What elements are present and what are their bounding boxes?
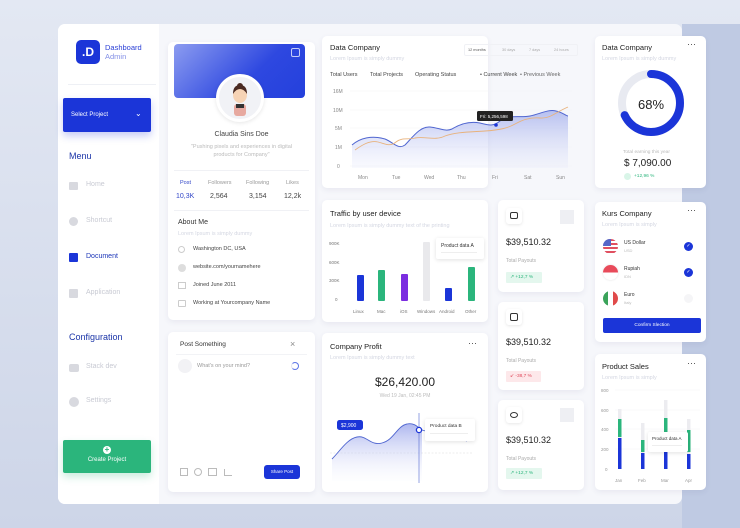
- panel: donut data company: Data Company: [602, 43, 652, 52]
- panel: product sales: ···: [687, 358, 696, 368]
- panel: kurs company: Lorem Ipsum is simply: [602, 222, 657, 228]
- line chart: [333, 89, 568, 181]
- panel: donut data company: [595, 36, 706, 188]
- panel: post something: Post Something: [180, 341, 226, 348]
- tabs: [330, 72, 560, 78]
- bar chart: 0: [335, 297, 338, 302]
- tabs: • Previous Week: [520, 72, 560, 78]
- panel: traffic by device: Lorem Ipsum is simply dummy text of the printing: [330, 223, 450, 229]
- config items: Stack dev: [86, 363, 117, 370]
- range tabs: [464, 44, 578, 56]
- panel: product sales: Lorem Ipsum is simply: [602, 375, 657, 381]
- logo text: Dashboard: [105, 43, 142, 52]
- line chart: Sat: [524, 175, 532, 181]
- avatar: [216, 74, 264, 122]
- line chart: 10M: [333, 108, 343, 114]
- create project button: +: [105, 445, 109, 454]
- stats: 2,564: [210, 193, 228, 200]
- about me: About Me: [178, 219, 208, 226]
- panel: profile: "Pushing pixels and experiences in digital: [191, 144, 292, 150]
- line chart: 0: [337, 164, 340, 170]
- area chart: $2,900: [341, 423, 357, 429]
- stacked bar chart: 200: [601, 447, 609, 452]
- panel: post something: ×: [290, 339, 295, 349]
- currency list: ✓: [686, 243, 691, 249]
- bar chart: Mac: [377, 309, 386, 314]
- stats: 3,154: [249, 193, 267, 200]
- main panel: [58, 24, 682, 504]
- panel: profile: website.com/yournamehere: [193, 264, 261, 270]
- panel: company profit: Company Profit: [330, 342, 382, 351]
- stats: Following: [246, 180, 269, 186]
- text: 24 hours: [554, 48, 569, 52]
- stacked bar chart: Mar: [661, 478, 669, 483]
- line chart: Thu: [457, 175, 466, 181]
- panel: post something: What's on your mind?: [197, 363, 250, 369]
- stacked bar chart: [601, 388, 693, 483]
- line chart: 5M: [335, 126, 342, 132]
- stacked bar chart: 400: [601, 427, 609, 432]
- tabs: Total Users: [330, 72, 358, 78]
- panel: profile: products for Company": [213, 152, 270, 158]
- panel: profile: Lorem Ipsum is simply dummy: [178, 231, 252, 237]
- line chart: Wed: [424, 175, 434, 181]
- line chart: Mon: [358, 175, 368, 181]
- tooltip: [648, 432, 688, 452]
- panel: company profit: Wed 19 Jan, 02:45 PM: [380, 393, 430, 399]
- menu items: Shortcut: [86, 217, 112, 224]
- panel: product sales: [595, 354, 706, 490]
- currency list: [602, 239, 693, 306]
- logo text: [105, 43, 142, 61]
- stats: Followers: [208, 180, 232, 186]
- currency list: US Dollar: [624, 240, 645, 246]
- bar chart: Other: [465, 309, 477, 314]
- share button: Share Post: [271, 469, 293, 474]
- logo text: Admin: [105, 52, 126, 61]
- panel: profile: [168, 42, 315, 320]
- menu items: Home: [86, 181, 105, 188]
- tabs: Operating Status: [415, 72, 456, 78]
- bar chart: 300K: [329, 278, 340, 283]
- stats: 12,2k: [284, 193, 301, 200]
- select project button: Select Project: [71, 112, 108, 118]
- currency list: Italy: [624, 300, 631, 305]
- select project button: [63, 98, 151, 132]
- panel: data company chart: Lorem Ipsum is simply dummy: [330, 56, 404, 62]
- tabs: Total Projects: [370, 72, 403, 78]
- line chart: Tue: [392, 175, 401, 181]
- share button: [264, 465, 300, 479]
- panel: post something: [168, 332, 315, 492]
- currency list: ✓: [686, 269, 691, 275]
- confirm button: Confirm Slection: [634, 323, 670, 328]
- stacked bar chart: Feb: [638, 478, 646, 483]
- panel: kurs company: Kurs Company: [602, 209, 652, 218]
- logo icon: [76, 40, 100, 64]
- panel: data company chart: 12 months: [468, 48, 486, 52]
- payout card 3: [498, 400, 584, 490]
- panel: donut data company: Lorem Ipsum is simply dummy: [602, 56, 676, 62]
- payout card 1: ↗ +12,7 %: [510, 275, 533, 280]
- select project button: ⌄: [135, 109, 142, 118]
- currency list: IDN: [624, 274, 631, 279]
- panel: company profit: Lorem Ipsum is simply dummy text: [330, 355, 415, 361]
- donut: [618, 70, 684, 136]
- area chart: [330, 413, 472, 483]
- panel: profile: Working at Yourcompany Name: [193, 300, 270, 306]
- currency list: Euro: [624, 292, 635, 298]
- line chart: Sun: [556, 175, 565, 181]
- bar chart: iOS: [400, 309, 408, 314]
- panel: company profit: [322, 333, 488, 492]
- payout card 3: Total Payouts: [506, 456, 536, 462]
- panel: donut data company: $ 7,090.00: [624, 158, 671, 169]
- stats: Likes: [286, 180, 299, 186]
- banner: [174, 44, 305, 98]
- confirm button: [603, 318, 701, 333]
- stacked bar chart: Apr: [685, 478, 693, 483]
- bar chart: 900K: [329, 241, 340, 246]
- bar chart: Android: [439, 309, 455, 314]
- stacked bar chart: 0: [605, 467, 608, 472]
- bar chart: Windows: [417, 309, 436, 314]
- payout card 2: $39,510.32: [506, 337, 551, 347]
- tooltip: Product data B: [430, 424, 462, 429]
- panel: company profit: $26,420.00: [375, 375, 435, 389]
- tooltip: Product data A: [652, 436, 682, 441]
- line chart: 16M: [333, 89, 343, 95]
- panel: product sales: Product Sales: [602, 362, 649, 371]
- currency list: USD: [624, 248, 632, 253]
- create project button: Create Project: [88, 457, 126, 463]
- tooltip: [425, 419, 475, 441]
- stacked bar chart: Jan: [615, 478, 623, 483]
- config items: [69, 362, 117, 407]
- panel: kurs company: [595, 202, 706, 342]
- logo icon: .D: [82, 45, 94, 59]
- panel: company profit: ···: [468, 338, 477, 348]
- stats: [176, 180, 302, 200]
- text: 30 days: [502, 48, 515, 52]
- panel: donut data company: Total earning this year: [623, 150, 670, 155]
- bar chart: [329, 241, 477, 314]
- panel: donut data company: ···: [687, 39, 696, 49]
- payout card 2: ↙ -38,7 %: [510, 374, 532, 379]
- create project button: [63, 440, 151, 473]
- tooltip: Product data A: [441, 243, 474, 249]
- menu heading: Menu: [69, 151, 92, 161]
- bar chart: Linux: [353, 309, 365, 314]
- tooltip: [436, 238, 484, 259]
- line chart: Fri: [492, 175, 498, 181]
- right blue backdrop: [682, 24, 740, 528]
- config items: Settings: [86, 397, 111, 404]
- menu items: Application: [86, 289, 120, 296]
- menu items: [69, 181, 120, 298]
- stats: 10,3K: [176, 193, 194, 200]
- name: Claudia Sins Doe: [214, 131, 269, 138]
- payout card 3: ↗ +12,7 %: [510, 471, 533, 476]
- payout card 1: $39,510.32: [506, 237, 551, 247]
- text: 7 days: [529, 48, 540, 52]
- payout card 1: [498, 200, 584, 292]
- stacked bar chart: 600: [601, 408, 609, 413]
- panel: traffic by device: [322, 200, 488, 322]
- stats: Post: [180, 180, 191, 186]
- panel: traffic by device: Traffic by user device: [330, 209, 401, 218]
- panel: data company chart: Data Company: [330, 43, 380, 52]
- panel: profile: Joined June 2011: [193, 282, 236, 288]
- line chart: 1M: [335, 145, 342, 151]
- bar chart: 600K: [329, 260, 340, 265]
- panel: donut data company: +12,96 %: [634, 174, 654, 179]
- payout card 3: $39,510.32: [506, 435, 551, 445]
- configuration heading: Configuration: [69, 332, 123, 342]
- payout card 2: Total Payouts: [506, 358, 536, 364]
- payout card 1: Total Payouts: [506, 258, 536, 264]
- sidebar: [58, 24, 159, 504]
- panel: profile: Washington DC, USA: [193, 246, 246, 252]
- line chart: Fri: 5,256,598: [480, 114, 508, 119]
- panel: kurs company: ···: [687, 205, 696, 215]
- stacked bar chart: 800: [601, 388, 609, 393]
- currency list: Rupiah: [624, 266, 640, 272]
- payout card 2: [498, 302, 584, 390]
- panel: data company chart: [322, 36, 488, 188]
- toolbar icons: [180, 468, 232, 476]
- tabs: • Current Week: [480, 72, 517, 78]
- donut: 68%: [638, 97, 664, 112]
- menu items: Document: [86, 253, 118, 260]
